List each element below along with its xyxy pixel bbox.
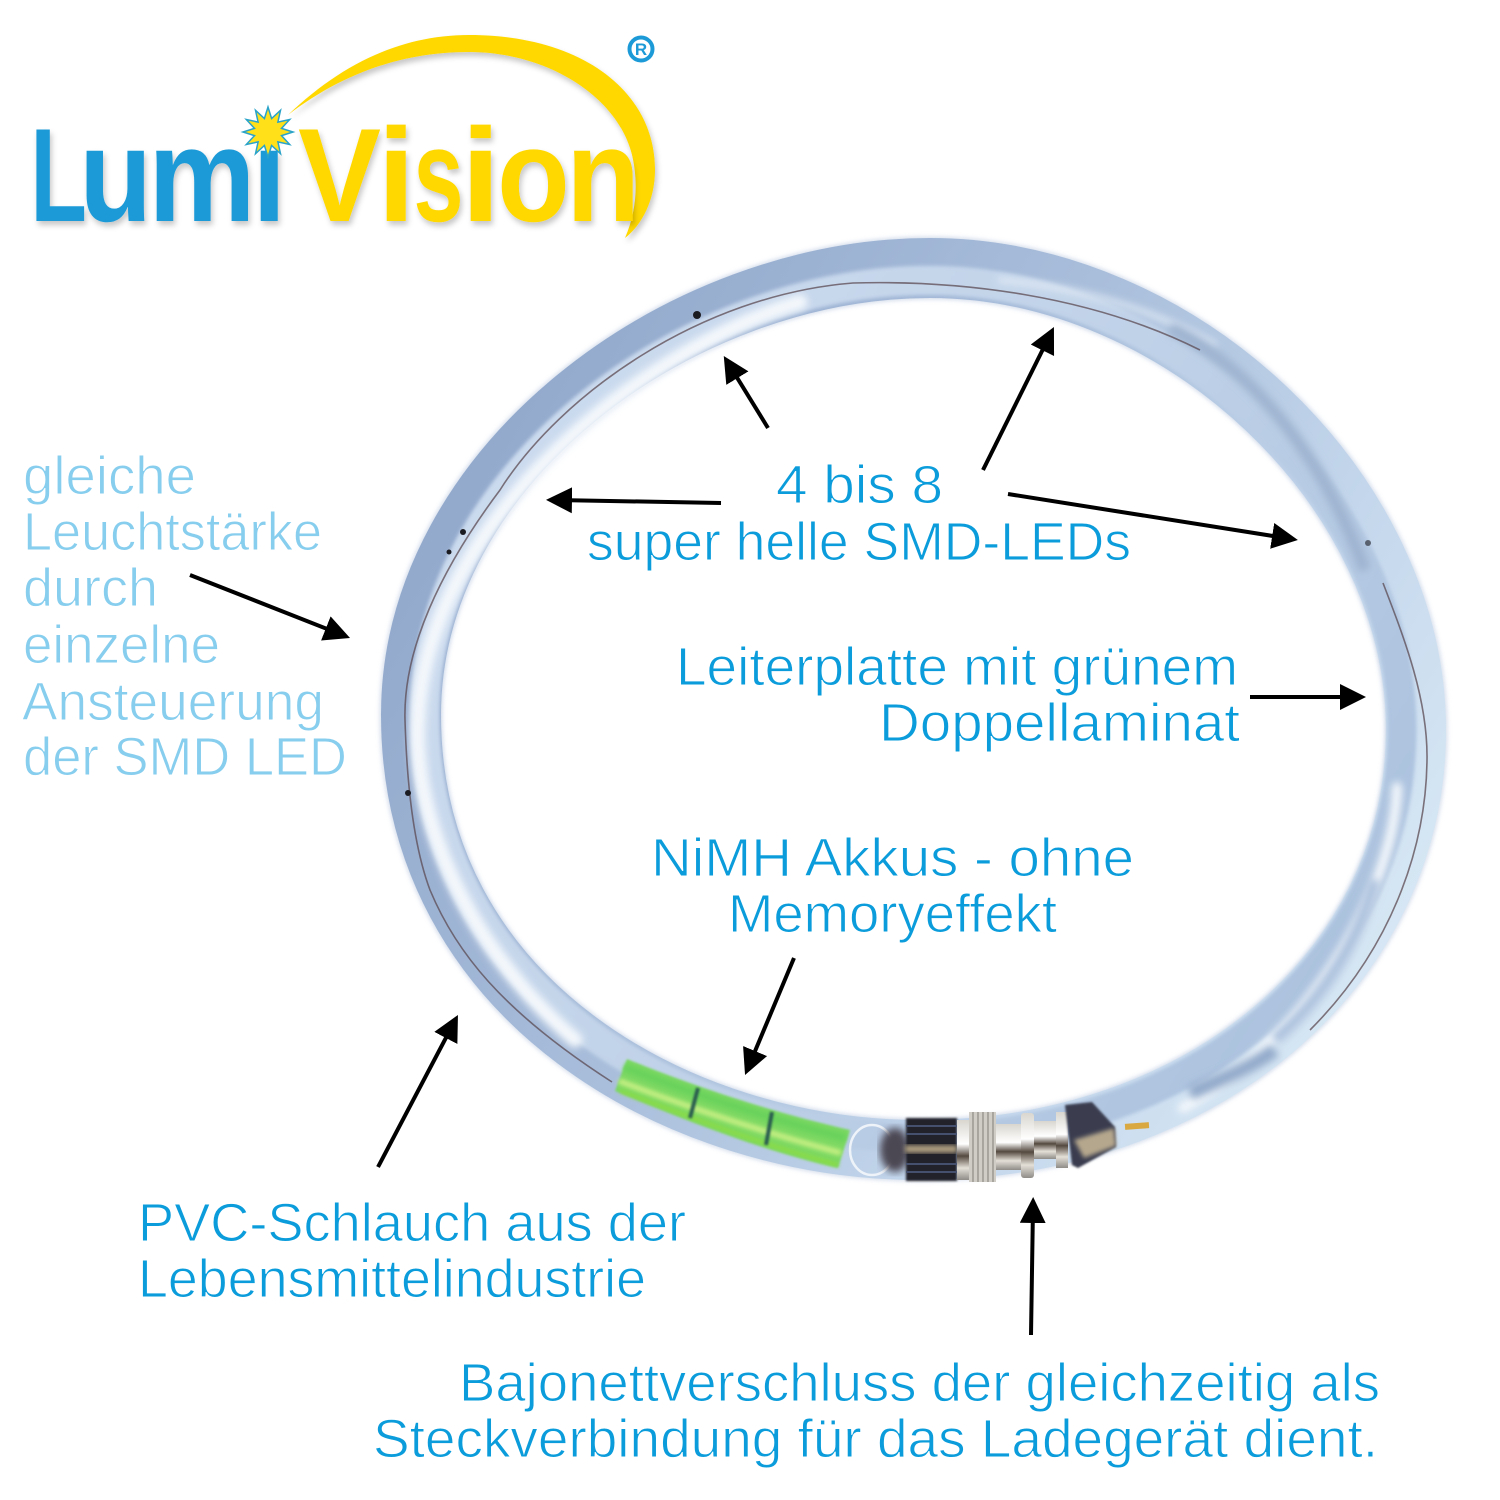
logo: wordmark Vision: i bbox=[377, 102, 416, 250]
tube highlights bbox=[418, 280, 1397, 1108]
logo: wordmark Vision: V bbox=[298, 102, 381, 250]
logo: LumiVision bbox=[30, 35, 655, 250]
arrows bbox=[190, 336, 1356, 1335]
text: LED count: super helle SMD-LEDs bbox=[587, 512, 1131, 572]
text: LED count bbox=[587, 455, 1131, 572]
logo: wordmark Vision: i bbox=[460, 102, 501, 250]
arrow: PVC tube bbox=[378, 1024, 453, 1167]
text: NiMH batteries: NiMH Akkus - ohne bbox=[651, 828, 1134, 888]
logo: wordmark Vision: n bbox=[566, 102, 640, 250]
arrow: LED upper left bbox=[729, 364, 768, 428]
text: PVC tube: PVC-Schlauch aus der bbox=[138, 1193, 686, 1253]
text: NiMH batteries: Memoryeffekt bbox=[728, 884, 1057, 944]
arrow: NiMH batteries bbox=[749, 958, 794, 1066]
arrow: bayonet connector bbox=[1031, 1207, 1033, 1335]
logo: registered trademark mark: R bbox=[635, 40, 647, 59]
green NiMH battery cells bbox=[615, 1059, 850, 1168]
bayonet connector bbox=[850, 1102, 1149, 1182]
inner wire bbox=[405, 283, 1427, 1082]
logo: wordmark Lumi: u bbox=[79, 102, 152, 250]
text: equal brightness: Ansteuerung bbox=[22, 672, 324, 732]
logo: wordmark Lumi: i bbox=[252, 102, 286, 250]
text: LED count: 4 bis 8 bbox=[776, 455, 943, 515]
text: equal brightness: durch bbox=[23, 558, 158, 618]
arrow: LED left bbox=[556, 500, 721, 503]
logo: sun star icon bbox=[243, 107, 293, 157]
text: equal brightness: der SMD LED bbox=[23, 727, 347, 787]
logo: registered trademark mark bbox=[630, 38, 652, 60]
text: equal brightness: einzelne bbox=[23, 615, 220, 675]
tube ring photo bbox=[405, 268, 1427, 1182]
text: circuit board: Doppellaminat bbox=[879, 693, 1240, 753]
text: bayonet connector bbox=[373, 1353, 1380, 1469]
dark specks on wire bbox=[405, 311, 1371, 796]
logo: wordmark Vision: s bbox=[413, 102, 464, 250]
text: circuit board: Leiterplatte mit grünem bbox=[676, 637, 1238, 697]
logo: wordmark Vision: o bbox=[497, 102, 570, 250]
bulb inside tube bbox=[850, 1125, 894, 1175]
logo: yellow swoosh arc bbox=[288, 35, 655, 238]
text: bayonet connector: Steckverbindung für das Ladegerät dient. bbox=[373, 1409, 1378, 1469]
arrow: brightness to ring bbox=[190, 575, 341, 634]
text: equal brightness: Leuchtstärke bbox=[23, 502, 322, 562]
text: circuit board bbox=[676, 637, 1240, 753]
arrow: LED right bbox=[1008, 494, 1288, 538]
arrow: circuit board bbox=[1250, 695, 1356, 699]
text: PVC tube: Lebensmittelindustrie bbox=[138, 1249, 646, 1309]
inner grey shadow bands bbox=[1170, 328, 1375, 1093]
arrow: LED top bbox=[983, 336, 1050, 470]
text: NiMH batteries bbox=[651, 828, 1134, 944]
logo: wordmark Lumi: m bbox=[148, 102, 256, 250]
text: PVC tube bbox=[138, 1193, 686, 1309]
text: equal brightness: gleiche bbox=[23, 446, 196, 506]
text: bayonet connector: Bajonettverschluss der gleichzeitig als bbox=[459, 1353, 1380, 1413]
text: equal brightness bbox=[22, 446, 347, 787]
logo: wordmark Lumi: L bbox=[30, 102, 87, 250]
